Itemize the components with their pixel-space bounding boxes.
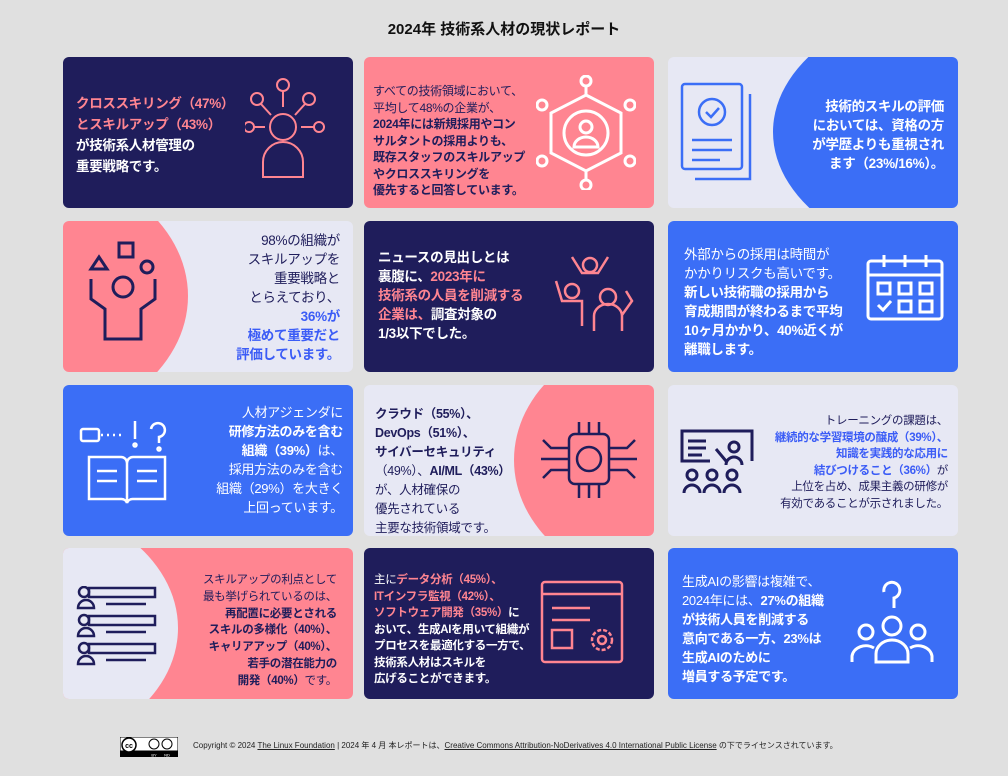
text block: 主要な技術領域です。 [375, 521, 496, 535]
text block: 外部からの採用は時間が [684, 247, 829, 262]
text block [76, 96, 234, 174]
text block: 既存スタッフのスキルアップ [373, 150, 525, 164]
text block: 優先すると回答しています。 [373, 183, 524, 197]
icon: people cheering [554, 256, 634, 331]
text block: スキルアップの利点として [203, 574, 337, 586]
text block: 新しい技術職の採用から [684, 285, 829, 300]
text block: とらえており、 [249, 290, 340, 305]
text block: ソフトウェア開発（35%）に [374, 607, 519, 619]
icon: certificate documents [680, 82, 752, 180]
text block [216, 405, 343, 515]
panel: training challenges [668, 385, 958, 536]
text block: 組織（29%）を大きく [216, 481, 343, 496]
text block: 裏腹に、2023年に [378, 269, 486, 284]
text block: 広げることができます。 [374, 673, 496, 685]
text block: 技術系人材はスキルを [374, 656, 486, 668]
text block: 技術的スキルの評価 [825, 99, 944, 114]
text block: 意向である一方、23%は [682, 631, 821, 646]
text block: 生成AIの影響は複雑で、 [682, 574, 820, 589]
text block: 主にデータ分析（45%）、 [374, 574, 502, 586]
text block: プロセスを最適化する一方で、 [374, 640, 530, 652]
text block: 増員する予定です。 [682, 669, 795, 684]
text block: が、人材確保の [375, 483, 460, 497]
text block [374, 572, 530, 685]
text block: 研修方法のみを含む [229, 424, 343, 439]
text block [373, 84, 526, 197]
text block: 2024年には新規採用やコン [373, 117, 516, 131]
text block: キャリアアップ（40%）、 [209, 641, 337, 653]
panel: external hiring [668, 221, 958, 372]
panel: tech domains [364, 385, 654, 536]
text block: おいて、生成AIを用いて組織が [374, 624, 529, 636]
text block: DevOps（51%）、 [375, 426, 475, 440]
text block: 1/3以下でした。 [378, 326, 475, 341]
text block: 評価しています。 [236, 347, 340, 362]
text block: 採用方法のみを含む [229, 462, 343, 477]
panel: generative AI impact [668, 548, 958, 699]
icon: brain chip [541, 422, 637, 498]
text block: 技術系の人員を削減する [378, 288, 523, 303]
text block: ITインフラ監視（42%）、 [374, 590, 500, 602]
text block: が学歴よりも重視され [812, 137, 944, 152]
icon: person juggling [88, 242, 156, 340]
text block: スキルアップを [248, 252, 340, 267]
icon: creative commons badge: cc [125, 743, 133, 750]
text block: 98%の組織が [261, 233, 340, 248]
text block: サイバーセキュリティ [375, 445, 496, 459]
text block: 離職します。 [684, 342, 762, 357]
text block: 平均して48%の企業が、 [373, 100, 501, 114]
text block: 開発（40%）です。 [238, 675, 337, 687]
panel: skills over degrees [668, 57, 958, 208]
panel: cross-skilling [63, 57, 353, 208]
text block: スキルの多様化（40%）、 [209, 624, 337, 636]
text block: サルタントの採用よりも、 [373, 134, 513, 148]
text block: とスキルアップ（43%） [76, 117, 221, 132]
panel: benefits of upskilling [63, 548, 353, 699]
text block: 36%が [301, 309, 340, 324]
text block [812, 99, 944, 171]
footer text: Copyright © 2024 The Linux Foundation | 2024 年 4 月 本レポートは、Creative Commons Attribution-NoDerivatives 4.0 International Public License の下でライセンスされています。 [193, 741, 838, 750]
text block [203, 573, 337, 687]
text block: 若手の潜在能力の [247, 658, 337, 670]
text block: 10ヶ月かかり、40%近くが [684, 323, 843, 338]
text block [684, 247, 843, 357]
text block [775, 414, 948, 510]
icon: person with ideas [245, 78, 325, 178]
text block: 結びつけること（36%）が [814, 464, 948, 476]
icon: browser gear [540, 580, 624, 664]
text block [378, 250, 523, 341]
text block: 育成期間が終わるまで平均 [684, 304, 842, 319]
icon: creative commons badge [120, 737, 178, 757]
text block: クラウド（55%）、 [375, 407, 478, 421]
icon: hexagon gear [536, 75, 636, 190]
text block: （49%）、AI/ML（43%） [375, 464, 511, 478]
panel: training agenda [63, 385, 353, 536]
text block: が技術系人材管理の [76, 138, 195, 153]
text block [375, 407, 511, 535]
text block: 組織（39%）は、 [242, 443, 343, 458]
text block: 極めて重要だと [248, 328, 340, 343]
text block: 最も挙げられているのは、 [203, 591, 337, 603]
text block: が技術人員を削減する [682, 612, 809, 627]
text block: 上位を占め、成果主義の研修が [791, 481, 948, 493]
icon: profile list [76, 586, 156, 666]
text block: 優先されている [375, 502, 460, 516]
text block: ます（23%/16%）。 [829, 156, 944, 171]
icon: calendar [866, 255, 944, 320]
text block: かかりリスクも高いです。 [684, 266, 841, 281]
text block [682, 574, 824, 684]
text block: 人材アジェンダに [242, 405, 343, 420]
text block: ニュースの見出しとは [378, 250, 509, 265]
title: 2024年 技術系人材の現状レポート [388, 21, 620, 38]
text block: クロススキリング（47%） [76, 96, 234, 111]
text block: 重要戦略と [274, 271, 340, 286]
text block: 継続的な学習環境の醸成（39%）、 [775, 432, 948, 444]
text block: 重要戦略です。 [76, 159, 167, 174]
icon: team with leader [850, 580, 934, 664]
panel: 98% organizations [63, 221, 353, 372]
text block: においては、資格の方 [813, 118, 944, 133]
text block: 2024年には、27%の組織 [682, 593, 824, 608]
panel: layoffs [364, 221, 654, 372]
text block: すべての技術領域において、 [373, 84, 523, 98]
text block: 知識を実践的な応用に [836, 448, 948, 460]
icon: teacher with students [680, 430, 754, 493]
panel: 48% companies [364, 57, 654, 208]
text block: トレーニングの課題は、 [825, 415, 948, 427]
text block: やクロススキリングを [373, 166, 490, 180]
text block: 上回っています。 [243, 500, 343, 515]
text block: 有効であることが示されました。 [780, 498, 948, 510]
text block: 再配置に必要とされる [225, 608, 337, 620]
panel: generative AI processes [364, 548, 654, 699]
icon: book with ideas [80, 421, 166, 504]
text block: 企業は、調査対象の [378, 307, 497, 322]
text block [236, 233, 340, 362]
text block: 生成AIのために [682, 650, 771, 665]
